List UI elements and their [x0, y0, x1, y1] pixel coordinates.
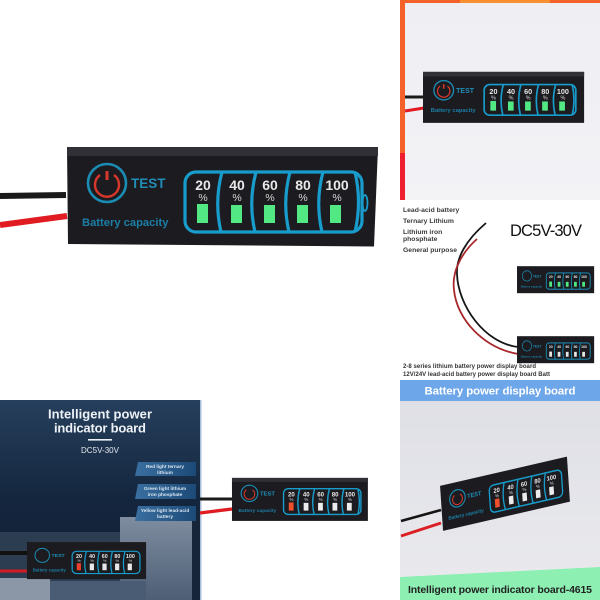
- indicator board: [440, 457, 570, 531]
- indicator board: 20: [76, 554, 82, 560]
- indicator board: 60: [521, 480, 528, 489]
- unlit board: 20: [549, 345, 553, 349]
- callout: green light: Green light lithium: [144, 486, 186, 492]
- indicator board: Battery capacity: [239, 508, 277, 514]
- indicator board: 20: [288, 492, 295, 498]
- connecting wires: [454, 223, 518, 354]
- indicator board: 60: [317, 492, 325, 498]
- unlit board: [517, 336, 594, 363]
- battery type list: Ternary Lithium: [403, 218, 454, 225]
- indicator board: %: [289, 497, 293, 502]
- indicator board: %: [491, 95, 496, 101]
- main indicator board: 60: [262, 177, 278, 193]
- green-lit board: Battery capacity: [521, 284, 542, 289]
- indicator board: %: [509, 490, 513, 496]
- battery type list: General purpose: [403, 247, 457, 254]
- caption band: [400, 567, 600, 600]
- indicator board: %: [304, 497, 308, 502]
- indicator board: TEST: [456, 88, 475, 95]
- description: 2-8 series lithium battery power display board: [403, 364, 536, 370]
- indicator board: [232, 478, 368, 521]
- panel: red-lit board photo: [200, 400, 368, 600]
- indicator board: %: [550, 480, 554, 486]
- main indicator board: %: [265, 192, 275, 204]
- main indicator board: 20: [195, 177, 211, 193]
- battery type list: Lithium iron: [403, 229, 442, 236]
- main indicator board: 80: [295, 177, 311, 193]
- indicator board: 100: [126, 554, 135, 560]
- indicator board: %: [536, 483, 540, 489]
- indicator board: 40: [507, 87, 515, 96]
- indicator board: Battery capacity: [448, 508, 484, 522]
- unlit board: 80: [574, 345, 577, 349]
- indicator board: 60: [102, 554, 108, 560]
- indicator board: 40: [303, 492, 310, 498]
- indicator board: 80: [114, 554, 120, 560]
- green-lit board: 20: [549, 275, 553, 279]
- main indicator board: %: [232, 192, 242, 204]
- green-lit board: 40: [557, 275, 561, 279]
- callout: red light: [135, 462, 196, 476]
- green-lit board: 80: [574, 275, 577, 279]
- panel: dark intelligent power tile: [0, 400, 200, 600]
- indicator board: Battery capacity: [431, 108, 476, 114]
- main indicator board: 40: [229, 177, 245, 193]
- unlit board: 60: [565, 345, 569, 349]
- indicator board: %: [77, 558, 81, 563]
- callout: red light: lithium: [157, 470, 173, 476]
- indicator board: TEST: [51, 553, 66, 559]
- main indicator board: TEST: [131, 176, 166, 191]
- callout: yellow light: Yellow light lead-acid: [141, 508, 189, 514]
- panel: voltage and battery types tile: [403, 207, 594, 378]
- indicator board: 40: [89, 554, 95, 560]
- indicator board: %: [116, 558, 120, 563]
- indicator board: 20: [493, 486, 501, 495]
- banner: battery power display board: [400, 380, 600, 401]
- main indicator board: %: [298, 192, 308, 204]
- indicator board: 100: [345, 492, 356, 498]
- callout: green light: [135, 484, 196, 499]
- indicator board: [423, 72, 584, 123]
- unlit board: TEST: [533, 344, 542, 348]
- indicator board: Battery capacity: [33, 567, 66, 572]
- caption band: Intelligent power indicator board-4615: [408, 584, 592, 596]
- callout: yellow light: [135, 506, 196, 521]
- main indicator board: 100: [325, 177, 349, 193]
- indicator board: 80: [534, 477, 542, 486]
- indicator board: TEST: [467, 491, 482, 500]
- voltage label: DC5V-30V: [510, 222, 582, 240]
- indicator board: %: [103, 558, 107, 563]
- indicator board: 80: [332, 492, 339, 498]
- indicator board: 40: [507, 483, 515, 492]
- panel: top-right product tile: [400, 0, 600, 200]
- indicator board: 20: [489, 87, 497, 96]
- indicator board: %: [333, 497, 337, 502]
- indicator board: 60: [524, 87, 532, 96]
- callout: yellow light: battery: [157, 514, 173, 520]
- main indicator board: %: [198, 192, 208, 204]
- indicator board: %: [348, 497, 352, 502]
- indicator board: %: [543, 95, 548, 101]
- main indicator board: %: [332, 192, 342, 204]
- battery type list: Lead-acid battery: [403, 207, 460, 214]
- indicator board: %: [526, 95, 531, 101]
- wires: [0, 195, 67, 225]
- unlit board: Battery capacity: [521, 354, 542, 359]
- unlit board: 40: [557, 345, 561, 349]
- green-lit board: TEST: [533, 274, 542, 278]
- indicator board: TEST: [260, 492, 275, 498]
- indicator board: %: [522, 486, 526, 493]
- panel: main product photo: [0, 147, 378, 246]
- description: 12V/24V lead-acid battery power display board Batt: [403, 372, 550, 378]
- indicator board: 100: [546, 473, 557, 483]
- green-lit board: 100: [581, 275, 587, 279]
- indicator board: %: [495, 493, 499, 499]
- battery type list: [403, 207, 460, 254]
- battery type list: phosphate: [403, 236, 438, 243]
- heading: Intelligent power: [48, 406, 152, 422]
- indicator board: %: [90, 558, 94, 563]
- banner: battery power display board: Battery power display board: [424, 386, 576, 398]
- callout: red light: Red light ternary: [146, 464, 184, 470]
- indicator board: %: [509, 95, 514, 101]
- green-lit board: [517, 266, 594, 293]
- main indicator board: Battery capacity: [82, 217, 169, 229]
- indicator board: %: [560, 95, 565, 101]
- description: [403, 364, 550, 378]
- panel: dark intelligent power tile: indicator board: [54, 420, 146, 436]
- callout: green light: iron phosphate: [148, 492, 183, 498]
- green-lit board: 60: [565, 275, 569, 279]
- main indicator board: [67, 147, 378, 246]
- indicator board: 100: [557, 87, 569, 96]
- indicator board: [27, 542, 146, 579]
- unlit board: 100: [581, 345, 587, 349]
- indicator board: 80: [541, 87, 549, 96]
- indicator board: %: [129, 558, 133, 563]
- panel: angled board photo: [400, 401, 600, 600]
- indicator board: %: [319, 497, 323, 502]
- voltage: DC5V-30V: [81, 446, 120, 455]
